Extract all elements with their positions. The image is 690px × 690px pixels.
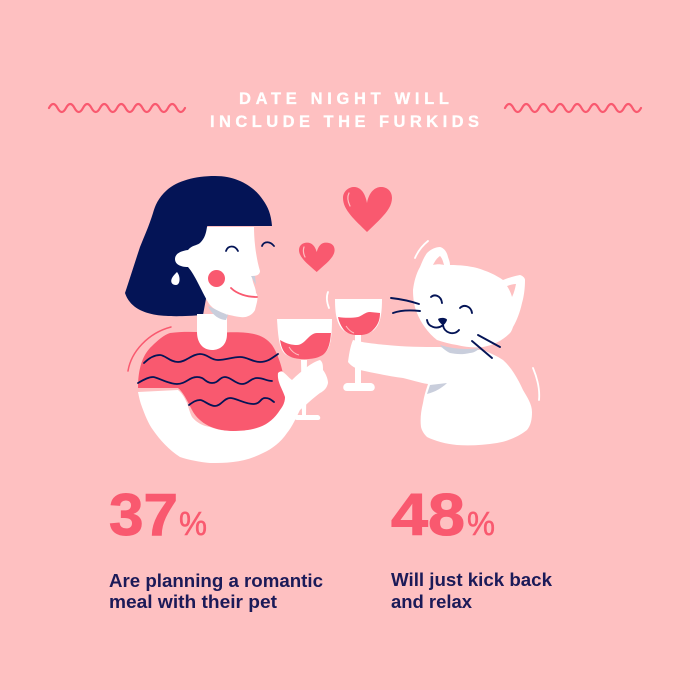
glass left <box>277 319 332 420</box>
small heart <box>299 243 335 272</box>
hearts <box>299 187 392 272</box>
cheek <box>208 270 225 287</box>
stat text: romantic meal <box>109 571 323 612</box>
cat collar shadow <box>440 345 480 354</box>
stat text: kick back <box>391 570 553 612</box>
stat: 48%: 48 <box>391 482 465 548</box>
large heart <box>343 187 392 232</box>
title <box>210 90 479 131</box>
neck <box>197 314 227 350</box>
cat face <box>391 295 500 358</box>
title: DATE NIGHT WILL <box>239 90 449 108</box>
motion arc <box>128 327 171 371</box>
stat: 37%: % <box>179 505 207 542</box>
stat: 48% <box>391 482 495 548</box>
stat text: kick back: Will just kick back <box>391 570 553 590</box>
earring <box>171 272 180 285</box>
motion arcs <box>327 241 539 400</box>
chin shadow <box>208 306 228 320</box>
cat nose <box>438 318 447 325</box>
stat: 37% <box>109 482 207 548</box>
eyes <box>226 242 274 251</box>
cat head <box>413 247 525 347</box>
stat text: kick back: and relax <box>391 592 472 612</box>
stat: 37%: 37 <box>109 482 178 548</box>
cat body <box>348 340 532 445</box>
illustration: woman <box>125 176 332 463</box>
illustration: cat <box>327 241 539 445</box>
arm and hand <box>138 360 328 463</box>
face <box>175 227 260 317</box>
cat inner ears <box>433 256 444 265</box>
stat: 48%: % <box>467 505 495 542</box>
title: INCLUDE THE FURKIDS <box>210 113 479 131</box>
smile <box>231 288 257 297</box>
wavy line left <box>49 104 185 112</box>
shirt stripes <box>138 354 278 406</box>
stat text: romantic meal: meal with their pet <box>109 592 277 612</box>
wavy line right <box>505 104 641 112</box>
hair <box>125 176 272 316</box>
stat text: romantic meal: Are planning a romantic <box>109 571 323 591</box>
shirt <box>138 332 285 431</box>
glass right <box>335 299 382 391</box>
